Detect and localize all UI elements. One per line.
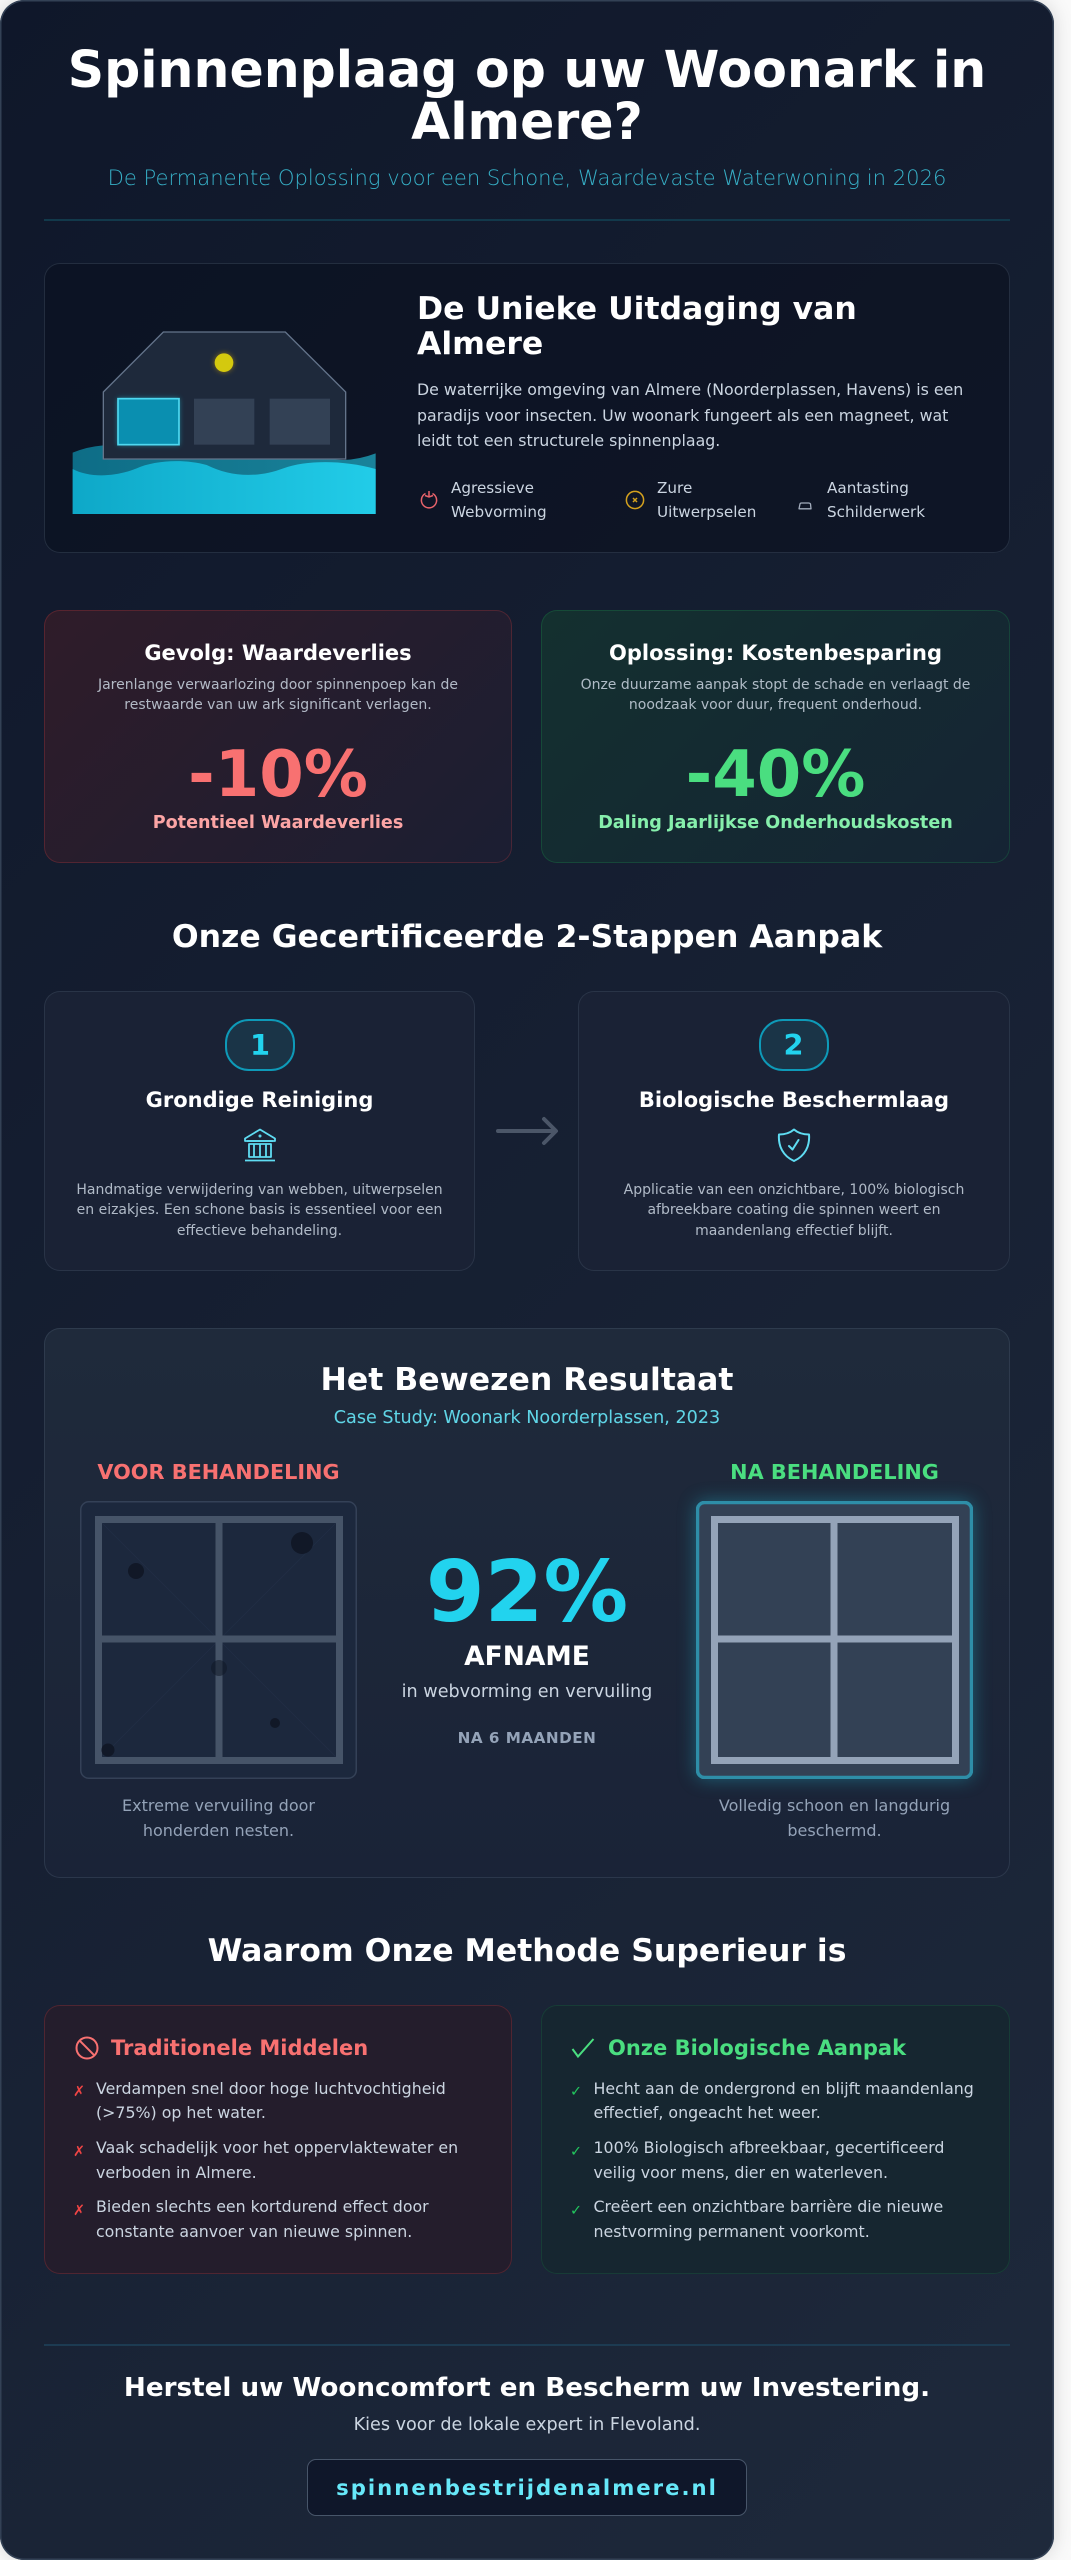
- description: paradijs voor insecten. Uw woonark fungeert als een magneet, wat: [417, 406, 948, 425]
- section heading: steps: Onze Gecertificeerde 2-Stappen Aanpak: [172, 919, 882, 955]
- stat: afname: AFNAME: [464, 1640, 590, 1672]
- title: Almere?: [411, 92, 643, 151]
- feature: webvorming: [451, 478, 547, 521]
- item text 2: 100% Biologisch afbreekbaar, gecertificeerd: [594, 2138, 944, 2157]
- heading: [417, 291, 857, 362]
- item text 1: effectief, ongeacht het weer.: [594, 2103, 821, 2122]
- item text 1: (>75%) op het water.: [96, 2103, 266, 2122]
- description: Jarenlange verwaarlozing door spinnenpoep kan de: [98, 677, 458, 693]
- window: before: [80, 1501, 357, 1779]
- panel: solution: [541, 610, 1010, 863]
- description: noodzaak voor duur, frequent onderhoud.: [629, 697, 922, 713]
- item 3: ✓: [570, 2203, 582, 2219]
- step number: 2: [783, 1028, 804, 1062]
- item text 3: Creëert een onzichtbare barrière die nieuwe: [594, 2197, 943, 2216]
- website button: [307, 2458, 747, 2516]
- step description: en eizakjes. Een schone basis is essentieel voor een: [77, 1202, 442, 1218]
- feature: uitwerpselen: Zure: [657, 478, 692, 496]
- title: [68, 40, 986, 151]
- step description: afbreekbare coating die spinnen weert en: [647, 1202, 941, 1218]
- item text 1: [594, 2079, 974, 2122]
- feature: schilderwerk: [827, 478, 925, 521]
- step title: Biologische Beschermlaag: [639, 1088, 949, 1112]
- heading: Oplossing: Kostenbesparing: [609, 641, 942, 665]
- feature: uitwerpselen: Uitwerpselen: [657, 503, 756, 521]
- icon: ban: [76, 2036, 98, 2060]
- heading: Traditionele Middelen: [111, 2036, 368, 2060]
- website button: spinnenbestrijdenalmere.nl: [336, 2474, 718, 2500]
- item text 2: [96, 2138, 458, 2182]
- heading: Almere: [417, 326, 543, 362]
- icon: web: [420, 491, 438, 509]
- case study: Case Study: Woonark Noorderplassen, 2023: [334, 1408, 720, 1428]
- stat label: Potentieel Waardeverlies: [153, 813, 403, 833]
- item text 3: constante aanvoer van nieuwe spinnen.: [96, 2222, 412, 2241]
- feature: webvorming: Webvorming: [451, 503, 547, 521]
- item text 2: Vaak schadelijk voor het oppervlaktewater en: [96, 2138, 458, 2157]
- caption: before: [122, 1796, 315, 1840]
- panel: result: [44, 1328, 1010, 1878]
- item 2: ✗: [73, 2144, 85, 2160]
- caption: before: honderden nesten.: [143, 1821, 294, 1840]
- caption: after: Volledig schoon en langdurig: [719, 1796, 950, 1815]
- item text 1: Verdampen snel door hoge luchtvochtigheid: [96, 2079, 446, 2098]
- label: after: NA BEHANDELING: [730, 1460, 939, 1484]
- label: before: VOOR BEHANDELING: [97, 1460, 340, 1484]
- feature: webvorming: Agressieve: [451, 478, 534, 496]
- item text 3: [594, 2197, 943, 2241]
- step number: [225, 1019, 295, 1071]
- step description: [624, 1182, 964, 1239]
- item 1: ✗: [73, 2084, 85, 2100]
- item text 1: Hecht aan de ondergrond en blijft maandenlang: [594, 2079, 974, 2098]
- panel: unique challenge: [44, 263, 1010, 553]
- item text 3: [96, 2197, 429, 2241]
- panel: step 1: [44, 991, 475, 1271]
- stat timeframe: NA 6 MAANDEN: [458, 1729, 596, 1747]
- heading: Het Bewezen Resultaat: [321, 1362, 733, 1398]
- item 1: ✓: [570, 2084, 582, 2100]
- icon: shield: [778, 1128, 810, 1162]
- step description: Applicatie van een onzichtbare, 100% biologisch: [624, 1182, 964, 1198]
- step title: Grondige Reiniging: [146, 1088, 373, 1112]
- step description: Handmatige verwijdering van webben, uitwerpselen: [76, 1182, 443, 1198]
- item 3: ✗: [73, 2203, 85, 2219]
- illustration: woonark on water: [72, 331, 376, 514]
- item 2: ✓: [570, 2144, 582, 2160]
- description: [417, 380, 963, 450]
- description: Onze duurzame aanpak stopt de schade en verlaagt de: [581, 677, 970, 693]
- step description: [76, 1182, 443, 1239]
- icon: droppings: [626, 490, 644, 510]
- item text 1: [96, 2079, 446, 2122]
- stat description: in webvorming en vervuiling: [402, 1682, 652, 1702]
- stat: -10%: -10%: [188, 738, 368, 812]
- item text 2: [594, 2138, 944, 2182]
- step number: 1: [250, 1028, 270, 1062]
- call to action heading: Herstel uw Wooncomfort en Bescherm uw Investering.: [124, 2373, 930, 2403]
- description: [97, 677, 458, 713]
- feature: schilderwerk: Aantasting: [827, 478, 909, 496]
- stat: 92%: 92%: [426, 1543, 628, 1641]
- call to action subtext: Kies voor de lokale expert in Flevoland.: [354, 2415, 700, 2435]
- subtitle: De Permanente Oplossing voor een Schone, Waardevaste Waterwoning in 2026: [108, 165, 946, 190]
- item text 2: veilig voor mens, dier en waterleven.: [594, 2163, 888, 2182]
- description: [581, 677, 970, 713]
- description: leidt tot een structurele spinnenplaag.: [417, 431, 720, 450]
- step description: effectieve behandeling.: [177, 1223, 342, 1239]
- panel: biological: [541, 2005, 1010, 2274]
- step number: [758, 1019, 828, 1071]
- window: after: [696, 1501, 973, 1779]
- caption: after: [719, 1796, 950, 1840]
- icon: paint: [798, 502, 812, 510]
- panel: traditional: [44, 2005, 512, 2274]
- heading: De Unieke Uitdaging van: [417, 291, 857, 327]
- title: Spinnenplaag op uw Woonark in: [68, 40, 986, 99]
- panel: step 2: [578, 991, 1010, 1271]
- item text 3: Bieden slechts een kortdurend effect door: [96, 2197, 429, 2216]
- feature: schilderwerk: Schilderwerk: [827, 503, 925, 521]
- item text 2: verboden in Almere.: [96, 2163, 257, 2182]
- feature: uitwerpselen: [657, 478, 756, 521]
- icon: check: [572, 2038, 594, 2058]
- description: De waterrijke omgeving van Almere (Noorderplassen, Havens) is een: [417, 380, 963, 399]
- panel: consequence: [44, 610, 512, 863]
- caption: before: Extreme vervuiling door: [122, 1796, 315, 1815]
- stat label: Daling Jaarlijkse Onderhoudskosten: [598, 813, 953, 833]
- section heading: comparison: Waarom Onze Methode Superieur is: [208, 1933, 846, 1969]
- heading: Gevolg: Waardeverlies: [144, 641, 412, 665]
- stat: -40%: -40%: [686, 738, 865, 812]
- caption: after: beschermd.: [787, 1821, 882, 1840]
- item text 3: nestvorming permanent voorkomt.: [594, 2222, 870, 2241]
- icon: building: [244, 1128, 276, 1162]
- description: restwaarde van uw ark significant verlagen.: [124, 697, 432, 713]
- step description: maandenlang effectief blijft.: [695, 1223, 893, 1239]
- heading: Onze Biologische Aanpak: [608, 2036, 906, 2060]
- arrow: [496, 1116, 558, 1145]
